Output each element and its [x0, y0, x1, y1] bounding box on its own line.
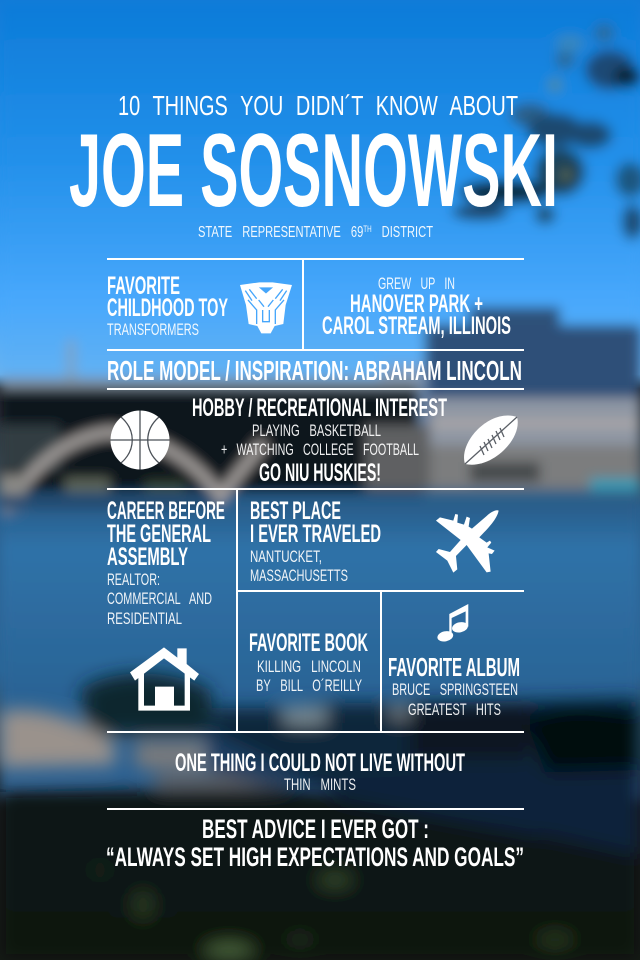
panel: grew up in — [322, 274, 511, 340]
panel: favorite childhood toy: TRANSFORMERS — [107, 320, 199, 339]
panel: favorite book: KILLING LINCOLN — [257, 657, 361, 676]
panel: hobby: PLAYING BASKETBALL — [252, 421, 381, 440]
title — [69, 90, 558, 241]
icon: basketball — [110, 410, 170, 470]
panel: favorite childhood toy — [107, 272, 292, 339]
icon: football — [464, 416, 518, 465]
pole — [67, 340, 75, 382]
district subtitle: STATE REPRESENTATIVE 69 — [198, 224, 436, 241]
icon: autobot — [240, 282, 292, 333]
panel: grew up in: CAROL STREAM, ILLINOIS — [322, 312, 511, 340]
panel: best place: I EVER TRAVELED — [250, 520, 381, 548]
panel: best place — [250, 497, 499, 585]
panel: career: THE GENERAL — [107, 520, 211, 548]
district subtitle: TH — [363, 224, 372, 234]
panel: favorite album: GREATEST HITS — [408, 700, 501, 719]
panel: favorite book: BY BILL O´REILLY — [256, 676, 362, 695]
icon: plane — [436, 510, 499, 573]
panel: favorite album: FAVORITE ALBUM — [388, 652, 520, 682]
panel: favorite album — [388, 604, 520, 719]
panel: favorite book — [249, 629, 368, 695]
panel: hobby: GO NIU HUSKIES! — [259, 459, 381, 487]
panel: best advice — [106, 814, 524, 872]
bridge — [0, 388, 420, 492]
panel: career: ASSEMBLY — [107, 543, 188, 571]
panel: favorite childhood toy: CHILDHOOD TOY — [107, 294, 228, 322]
panel: career — [107, 497, 225, 711]
panel: favorite book: FAVORITE BOOK — [249, 629, 368, 657]
icon: music note — [436, 604, 469, 643]
tree branches — [594, 24, 614, 42]
panel: favorite album: BRUCE SPRINGSTEEN — [392, 680, 518, 699]
district subtitle: DISTRICT — [372, 224, 433, 241]
buildings — [470, 307, 560, 347]
panel: hobby: HOBBY / RECREATIONAL INTEREST — [192, 394, 447, 422]
panel: one thing — [175, 749, 465, 794]
icon: house — [130, 647, 199, 711]
panel: grew up in: GREW UP IN — [378, 274, 455, 293]
panel: career: CAREER BEFORE — [107, 497, 225, 525]
panel: hobby: + WATCHING COLLEGE FOOTBALL — [221, 440, 419, 459]
panel: favorite childhood toy: FAVORITE — [107, 272, 180, 300]
panel: grew up in: HANOVER PARK + — [350, 290, 483, 318]
panel: best advice: BEST ADVICE I EVER GOT : — [202, 814, 429, 844]
panel: best place: MASSACHUSETTS — [250, 566, 348, 585]
panel: career: REALTOR: — [107, 570, 160, 589]
panel: career: RESIDENTIAL — [107, 609, 182, 628]
panel: career: COMMERCIAL AND — [107, 589, 212, 608]
grass flecks — [133, 891, 153, 919]
panel: hobby — [110, 394, 518, 487]
panel: best place: NANTUCKET, — [250, 547, 322, 566]
shore — [80, 674, 215, 735]
panel: one thing: THIN MINTS — [284, 775, 356, 794]
panel: best place: BEST PLACE — [250, 497, 341, 525]
